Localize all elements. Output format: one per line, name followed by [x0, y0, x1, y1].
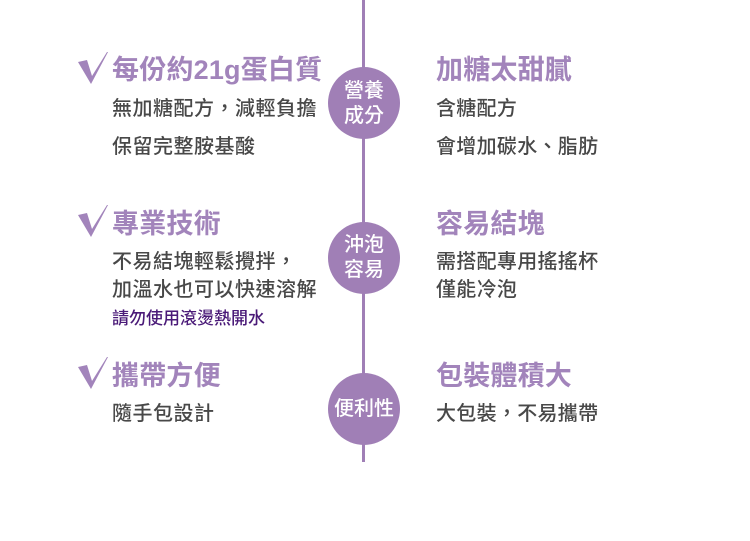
- badge: 沖泡容易: [328, 222, 400, 294]
- text: 加溫水也可以快速溶解: 加溫水也可以快速溶解: [112, 279, 317, 301]
- text: 大包裝，不易攜帶: 大包裝，不易攜帶: [436, 403, 598, 425]
- heading: 專業技術: 專業技術: [112, 209, 221, 239]
- heading: 包裝體積大: 包裝體積大: [436, 361, 572, 391]
- text: 含糖配方: 含糖配方: [436, 98, 517, 120]
- text: 無加糖配方: 無加糖配方，減輕負擔: [112, 98, 317, 120]
- badge: 沖泡容易: 沖泡: [344, 234, 384, 256]
- badge: 便利性: 便利性: [334, 398, 394, 420]
- badge: 沖泡容易: 容易: [344, 259, 384, 281]
- badge: 營養成分: 成分: [344, 105, 384, 127]
- text: 僅能冷泡: 僅能冷泡: [436, 279, 517, 301]
- text: 需搭配專用搖搖杯: 需搭配專用搖搖杯: [436, 251, 598, 273]
- badge: 營養成分: [328, 67, 400, 139]
- timeline vertical line: [362, 0, 365, 462]
- heading: 加糖太甜膩: 加糖太甜膩: [436, 55, 572, 85]
- text: 保留完整胺基酸: 保留完整胺基酸: [112, 136, 256, 158]
- heading: 容易結塊: 容易結塊: [436, 209, 545, 239]
- icon: check mark 1: [78, 52, 108, 84]
- heading: 攜帶方便: 攜帶方便: [112, 361, 221, 391]
- badge: 營養成分: 營養: [344, 80, 384, 102]
- text: warning: 請勿使用滾燙熱開水: [112, 309, 265, 328]
- badge: 便利性: [328, 373, 400, 445]
- text: 隨手包設計: 隨手包設計: [112, 403, 214, 425]
- text: 不易結塊輕鬆攪拌: 不易結塊輕鬆攪拌，: [112, 251, 296, 273]
- text: 會增加碳水、脂肪: 會增加碳水、脂肪: [436, 136, 598, 158]
- icon: check mark 3: [78, 357, 108, 389]
- heading: 每份約21g蛋白質: 每份約21g蛋白質: [112, 55, 322, 85]
- icon: check mark 2: [78, 205, 108, 237]
